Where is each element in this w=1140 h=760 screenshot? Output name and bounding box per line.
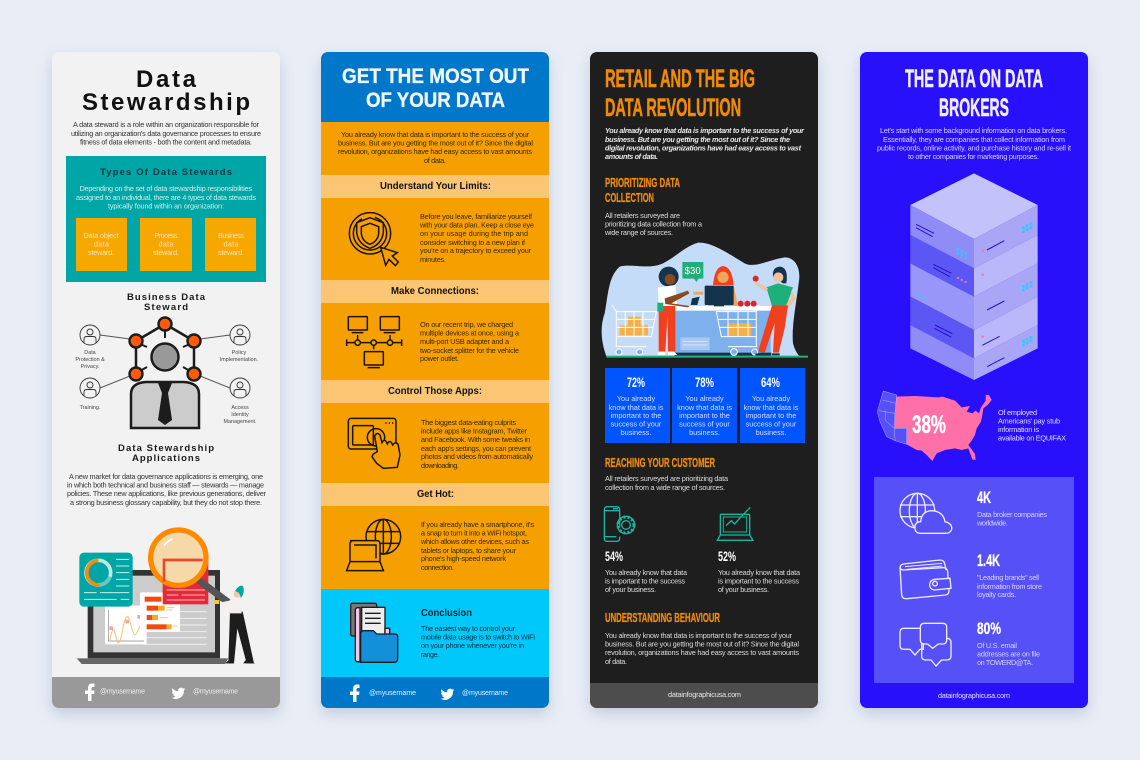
text: reaching — [605, 474, 729, 492]
diagram labels: Protection & — [75, 357, 105, 363]
handle: facebook: @myusername — [100, 688, 145, 696]
stat: 64%: know that data is — [744, 403, 799, 412]
title: Stewardship — [82, 89, 250, 116]
stat: 1.4K: 1.4K — [977, 552, 1000, 570]
box: data object data steward: data — [94, 240, 110, 249]
icon: facebook — [85, 684, 94, 701]
text: 54% — [605, 568, 688, 594]
icon: phone with gear — [604, 507, 635, 541]
stat: 1.4K: information from store — [977, 582, 1042, 591]
stat: 64%: You already — [752, 394, 790, 403]
title: Data — [136, 66, 197, 93]
box: process data steward: steward. — [153, 248, 179, 257]
applications text: policies. These new applications, like previous generations, deliver — [67, 489, 267, 498]
title: THE DATA ON DATA — [905, 65, 1043, 93]
text: control those apps: The biggest data-eating culprits — [421, 418, 516, 427]
heading: data stewardship applications — [118, 444, 214, 463]
text: 54%: is important to the success — [605, 577, 685, 586]
text: conclusion: on your phone whenever you're in — [421, 641, 524, 650]
magnifying glass — [151, 530, 228, 602]
stat: 78%: know that data is — [677, 403, 732, 412]
diagram labels — [75, 350, 258, 425]
text: equifax: available on EQUIFAX — [998, 434, 1066, 443]
header — [321, 52, 549, 122]
text: 52%: is important to the success — [718, 577, 799, 586]
heading: prioritizing data collection: COLLECTION — [605, 190, 654, 205]
text: prioritizing: All retailers surveyed are — [605, 211, 680, 220]
text: prioritizing: prioritizing data collection from a — [605, 220, 703, 229]
text: control those apps — [421, 418, 533, 470]
description: typically found within an organization: — [108, 202, 224, 210]
box: business data steward: Business — [218, 231, 244, 240]
stat: 80%: Of U.S. email — [977, 641, 1017, 650]
box: process data steward — [140, 218, 192, 271]
diagram labels: Identity — [231, 412, 249, 418]
text: understanding behaviour: You already know that data is important to the success of your — [605, 631, 793, 640]
map: united states 38%: 38% — [912, 411, 946, 439]
text: prioritizing — [604, 211, 703, 237]
band: get hot: Get Hot: — [417, 489, 454, 500]
price bubble — [682, 262, 703, 282]
stat: 72%: know that data is — [609, 403, 664, 412]
text: understand your limits: you're on a trajectory to exceed your — [420, 246, 532, 255]
icon: folder with documents — [351, 603, 398, 662]
diagram labels: Privacy. — [81, 364, 99, 370]
text: get hot: phone's high-speed network — [421, 554, 506, 563]
intro text: amounts of data. — [605, 152, 658, 161]
band: understand your limits — [321, 175, 549, 198]
text: conclusion: The easiest way to control your — [421, 624, 516, 633]
heading: prioritizing data collection: PRIORITIZING DATA — [605, 175, 680, 190]
band: get hot — [321, 483, 549, 506]
text: equifax — [998, 408, 1066, 443]
stat: 64%: success of your — [746, 420, 797, 429]
intro text — [338, 132, 532, 163]
applications text: in which both technical and business staff — stewards — manage — [67, 481, 264, 490]
stat: 72%: business. — [621, 428, 651, 437]
band: control those apps — [321, 380, 549, 403]
person body — [131, 382, 199, 428]
title — [82, 70, 250, 115]
stat: 4K: 4K — [977, 489, 991, 507]
intro text: Let's start with some background information on data brokers. — [880, 126, 1067, 135]
text: get hot: which allows other devices, such as — [420, 537, 529, 546]
text: 52%: of your business. — [718, 585, 769, 594]
icon: facebook — [350, 684, 360, 702]
text: make connections: multi-port USB adapter and a — [420, 337, 510, 346]
text: make connections: two-socket splitter for the vehicle — [420, 346, 519, 355]
icon: user access — [230, 378, 250, 398]
applications text: a strong business glossary capability, but they do not stop there. — [70, 498, 262, 507]
text: 54%: You already know that data — [605, 568, 688, 577]
stat: 80%: addresses are on file — [977, 650, 1040, 659]
stat: 78%: 78% — [695, 374, 714, 390]
icon: connected monitors — [347, 317, 402, 368]
panel: get the most out of your data — [321, 52, 549, 708]
text: control those apps: downloading. — [421, 461, 459, 470]
footer — [52, 677, 280, 708]
text: get hot: connection. — [421, 563, 454, 572]
woman figure — [213, 586, 255, 663]
icon: globe and cloud — [900, 493, 952, 533]
text: understanding behaviour: of data. — [605, 657, 627, 666]
text: get hot: a snap to turn it into a WiFi hotspot, — [421, 529, 527, 538]
heading: prioritizing data collection — [605, 175, 680, 205]
text: understand your limits: consider switching to a new plan if — [420, 238, 526, 247]
intro text: revolution, organizations have had easy access to vast amounts — [338, 147, 532, 156]
text: understand your limits: Before you leave, familiarize yourself — [420, 212, 533, 221]
network nodes — [130, 318, 200, 380]
icon: twitter — [171, 688, 185, 699]
diagram labels: Training. — [80, 405, 100, 411]
text: equifax: information is — [998, 425, 1039, 434]
text: prioritizing: wide range of sources. — [604, 228, 673, 237]
text: conclusion — [421, 624, 535, 659]
panel: conclusion — [321, 589, 549, 677]
stat: 1.4K: loyalty cards. — [977, 590, 1016, 599]
stat: 54%: 54% — [605, 548, 623, 564]
map: united states 38% — [877, 391, 992, 461]
cashier — [691, 266, 738, 306]
band: make connections — [321, 280, 549, 303]
text: understanding behaviour: revolution, organizations have had easy access to vast amounts — [605, 648, 799, 657]
text: control those apps: include apps like Instagram, Twitter — [421, 427, 528, 436]
heading: data stewardship applications: Data Stewardship — [118, 443, 214, 454]
text: make connections — [420, 320, 520, 363]
teal donut card — [79, 553, 133, 607]
intro text: You already know that data is important to the success of your — [341, 130, 530, 139]
counter — [671, 301, 771, 356]
title: RETAIL AND THE BIG — [605, 65, 755, 93]
heading: business data steward — [128, 294, 206, 310]
panel: data stewardship — [52, 52, 280, 708]
text: get hot: tablets or laptops, to share your — [421, 546, 517, 555]
icon: globe and laptop — [347, 519, 401, 571]
stat: 1.4K — [977, 552, 1042, 599]
text: conclusion: mobile data usage is to switch to WiFi — [421, 633, 535, 642]
stat: 4K — [976, 489, 1047, 528]
intro text: business. But are you getting the most out of it? Since the digital — [338, 139, 533, 148]
band: understand your limits: Understand Your Limits: — [380, 181, 491, 192]
text: understand your limits: minutes. — [420, 255, 446, 264]
stat: 72%: You already — [617, 394, 655, 403]
intro text: You already know that data is important to the success of your — [605, 126, 805, 135]
icon: user data protection — [80, 325, 100, 345]
header: OF YOUR DATA — [366, 89, 505, 112]
intro text: A data steward is a role within an organization responsible for — [73, 120, 260, 129]
box: business data steward — [205, 218, 256, 271]
stat: 72% — [605, 368, 670, 443]
right cart — [716, 305, 759, 355]
illustration: laptop with analytics — [77, 530, 255, 664]
text: understand your limits: on your usage during the trip and — [420, 229, 528, 238]
intro text: business. But are you getting the most out of it? Since the — [605, 135, 790, 144]
heading: conclusion: Conclusion — [421, 607, 472, 619]
description — [76, 184, 256, 210]
box: data object data steward: steward. — [88, 248, 114, 257]
icon: twitter — [440, 689, 454, 700]
footer — [321, 677, 549, 708]
stat: 64% — [740, 368, 805, 443]
heading: understanding behaviour: UNDERSTANDING BEHAVIOUR — [605, 610, 720, 625]
text: understand your limits — [419, 212, 534, 264]
description: Depending on the set of data stewardship responsibilities — [80, 184, 252, 193]
intro text — [71, 122, 261, 144]
text: understanding behaviour: business. But are you getting the most out of it? Since the digital — [605, 640, 799, 649]
handle: facebook: @myusername — [369, 690, 416, 697]
text: control those apps: and Facebook. With some tweaks in — [421, 435, 530, 444]
diagram labels: Data — [84, 350, 96, 356]
intro text — [877, 126, 1071, 161]
stat: 4K: worldwide. — [976, 518, 1008, 528]
stat: 64%: 64% — [761, 374, 780, 390]
handle: twitter: @myusername — [462, 690, 508, 697]
panel: data broker stats — [874, 477, 1074, 683]
box: business data steward: data — [224, 240, 239, 249]
text: 52%: You already know that data — [718, 568, 801, 577]
text: make connections: On our recent trip, we charged — [420, 320, 513, 329]
box: process data steward: data — [158, 240, 174, 249]
text: control those apps: each app's settings, you can prevent — [421, 444, 531, 453]
text: understand your limits: with your data plan. Keep a close eye — [419, 221, 534, 230]
person head — [152, 344, 178, 370]
text: 52% — [718, 568, 801, 594]
intro text: fitness of data elements - both the content and metadata. — [80, 138, 252, 146]
stat: 4K: Data broker companies — [977, 510, 1047, 519]
icon: user training — [80, 378, 100, 398]
right customer — [753, 267, 796, 355]
heading: Types Of Data Stewards — [100, 167, 232, 178]
text: reaching: collection from a wide range of sources. — [605, 483, 725, 492]
stat: 80%: on TOWERD@TA. — [977, 658, 1033, 667]
title: DATA REVOLUTION — [605, 94, 741, 122]
intro text: Essentially, they are companies that collect information from — [883, 135, 1065, 144]
stat: 78%: important to the — [679, 411, 730, 420]
applications text — [67, 472, 267, 507]
handle: twitter: @myusername — [193, 688, 238, 696]
stat: 1.4K: "Leading brands" sell — [977, 573, 1039, 582]
text: control those apps: photos and videos from automatically — [421, 452, 533, 461]
icon: laptop with growth chart — [717, 507, 753, 540]
icon: wallet — [900, 560, 951, 599]
illustration: server stack — [910, 173, 1038, 380]
stat: 80%: 80% — [977, 620, 1001, 638]
stat: 64%: important to the — [746, 411, 796, 420]
applications text: A new market for data governance applications is emerging, one — [69, 472, 263, 481]
description: assigned to an individual, there are 4 types of data stewards — [76, 193, 256, 202]
heading: business data steward: Business Data — [127, 292, 206, 303]
text: understanding behaviour — [605, 631, 799, 666]
text: 54%: of your business. — [605, 585, 656, 594]
band: make connections: Make Connections: — [391, 286, 479, 297]
title — [905, 65, 1043, 122]
left customer — [657, 267, 690, 355]
text: get hot: If you already have a smartphone, it's — [421, 520, 534, 529]
icon: chat bubbles — [900, 623, 951, 666]
panel: the data on data brokers — [860, 52, 1088, 708]
text: conclusion: range. — [421, 650, 439, 659]
heading: business data steward: Steward — [144, 302, 188, 313]
illustration: retail checkout — [602, 243, 808, 358]
intro text — [605, 126, 805, 161]
left cart — [612, 305, 656, 355]
stat: 78% — [672, 368, 737, 443]
panel: retail and the big data revolution — [590, 52, 818, 708]
diagram labels: Policy — [232, 350, 246, 356]
stat: 72%: important to the — [611, 411, 661, 420]
band: control those apps: Control Those Apps: — [388, 386, 482, 397]
heading: data stewardship applications: Applications — [132, 453, 200, 464]
diagram labels: Access — [231, 405, 249, 411]
icon: user policy — [230, 325, 250, 345]
diagram labels: Management. — [224, 419, 256, 425]
intro text: public records, online activity, and purchase history and re-sell it — [877, 144, 1071, 152]
stat: 72%: 72% — [627, 374, 645, 390]
price bubble: $30 — [685, 266, 701, 277]
diagram: business data steward network — [75, 318, 258, 428]
heading: reaching your customer: REACHING YOUR CUSTOMER — [605, 455, 715, 470]
text: reaching: All retailers surveyed are prioritizing data — [605, 474, 729, 483]
box: business data steward: steward. — [218, 248, 244, 257]
intro text: utilizing an organization's data governance processes to ensure — [71, 129, 261, 138]
stat: 78%: success of your — [679, 420, 730, 429]
intro text: to other companies for marketing purposes. — [908, 152, 1039, 161]
box: data object data steward — [76, 218, 127, 271]
panel: types of data stewards — [66, 156, 266, 282]
stat: 72%: success of your — [611, 420, 662, 429]
footer — [590, 683, 818, 708]
footer: datainfographicusa.com — [668, 690, 741, 699]
line chart card — [105, 606, 147, 644]
text: equifax: Of employed — [998, 408, 1037, 417]
intro text: digital revolution, organizations have had easy access to vast — [605, 144, 802, 152]
box: process data steward: Process — [154, 231, 178, 240]
text: equifax: Americans' pay stub — [998, 417, 1060, 426]
icon: touch screen hand — [348, 418, 400, 468]
text: get hot — [420, 520, 534, 572]
red report card — [163, 560, 208, 604]
icon: shield target with cursor — [349, 213, 398, 266]
stat: 64%: business. — [756, 428, 786, 437]
header: GET THE MOST OUT — [342, 65, 529, 88]
stat: 80% — [977, 620, 1040, 667]
footer: datainfographicusa.com — [938, 691, 1010, 700]
title: BROKERS — [939, 94, 1009, 122]
stat: 78%: business. — [689, 428, 720, 437]
stat: 78%: You already — [685, 394, 724, 403]
intro text: of data. — [424, 156, 446, 165]
text: make connections: power outlet. — [420, 354, 459, 363]
stat: 52%: 52% — [718, 548, 736, 564]
text: make connections: multiple devices at once, using a — [420, 329, 520, 338]
title — [605, 65, 755, 122]
bar chart card — [140, 592, 180, 632]
box: data object data steward: Data object — [84, 231, 118, 240]
diagram labels: Implementation. — [220, 357, 258, 363]
